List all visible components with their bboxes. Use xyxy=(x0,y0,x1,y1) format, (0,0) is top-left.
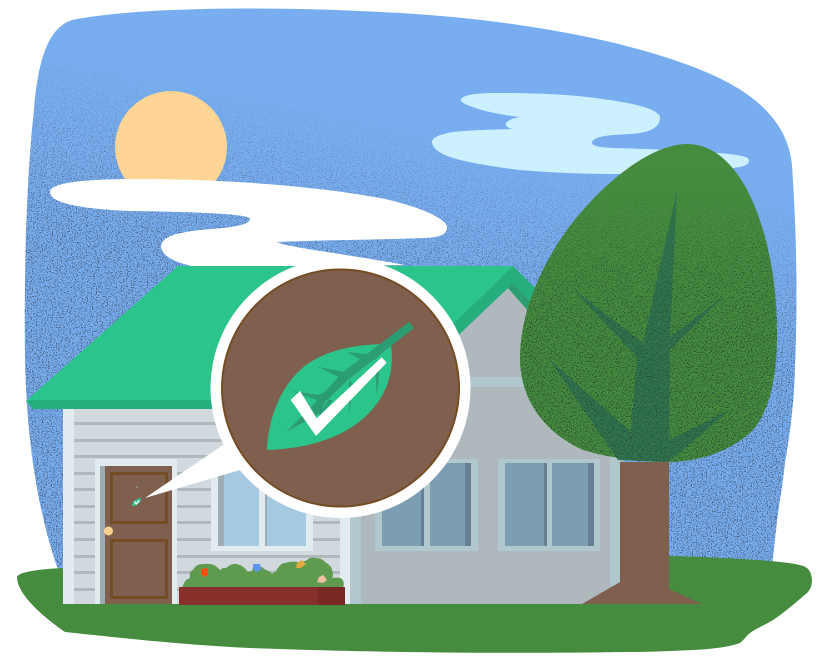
door knob xyxy=(104,526,113,536)
check mark xyxy=(291,357,387,436)
window: centre xyxy=(375,459,478,551)
planter shade xyxy=(318,587,345,605)
tree xyxy=(510,140,790,604)
tiny vein mark on door xyxy=(136,486,138,488)
flower: blue xyxy=(253,564,261,572)
trunk xyxy=(582,462,702,604)
trim: right corner xyxy=(610,440,620,586)
flower: peach xyxy=(317,575,327,583)
sky xyxy=(24,8,796,568)
icon: leaf with check xyxy=(267,322,414,450)
planter box with shrubs xyxy=(179,558,345,605)
callout badge xyxy=(145,258,470,518)
band: right section trim xyxy=(350,377,620,387)
cloud: white xyxy=(50,179,447,267)
wall: left section siding xyxy=(63,408,350,604)
trim: right wall left edge xyxy=(350,470,361,604)
planter xyxy=(179,587,345,605)
callout pointer xyxy=(145,445,240,498)
sun xyxy=(115,91,227,203)
window: right xyxy=(498,459,600,551)
flower: orange xyxy=(201,568,208,577)
roof xyxy=(26,266,545,409)
icon: tiny leaf check on door xyxy=(132,498,141,506)
wall: right section xyxy=(350,288,625,604)
leaf veins xyxy=(286,322,414,432)
badge ring xyxy=(210,258,470,518)
house xyxy=(26,266,625,604)
foliage xyxy=(520,144,777,462)
badge disc xyxy=(222,270,459,506)
cloud: light blue xyxy=(432,93,749,174)
shrubs xyxy=(182,558,344,588)
flower: gold xyxy=(296,560,306,568)
window: left xyxy=(211,460,313,551)
door xyxy=(95,459,177,604)
branches xyxy=(549,190,730,462)
ground xyxy=(17,556,812,653)
